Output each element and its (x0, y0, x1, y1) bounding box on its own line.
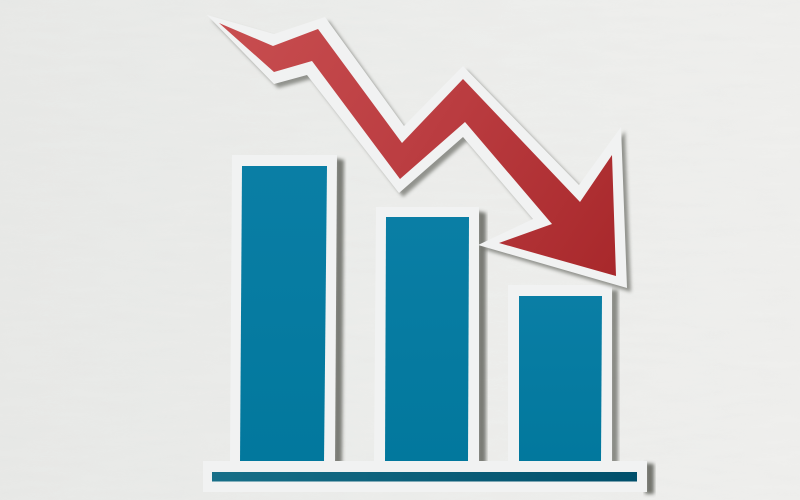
red downward arrow with white border (207, 15, 631, 292)
bar 2: middle bar (374, 207, 486, 464)
bar 1: tallest bar (230, 155, 344, 464)
base line of the chart (203, 461, 654, 494)
bar 3: shortest bar (508, 285, 618, 464)
